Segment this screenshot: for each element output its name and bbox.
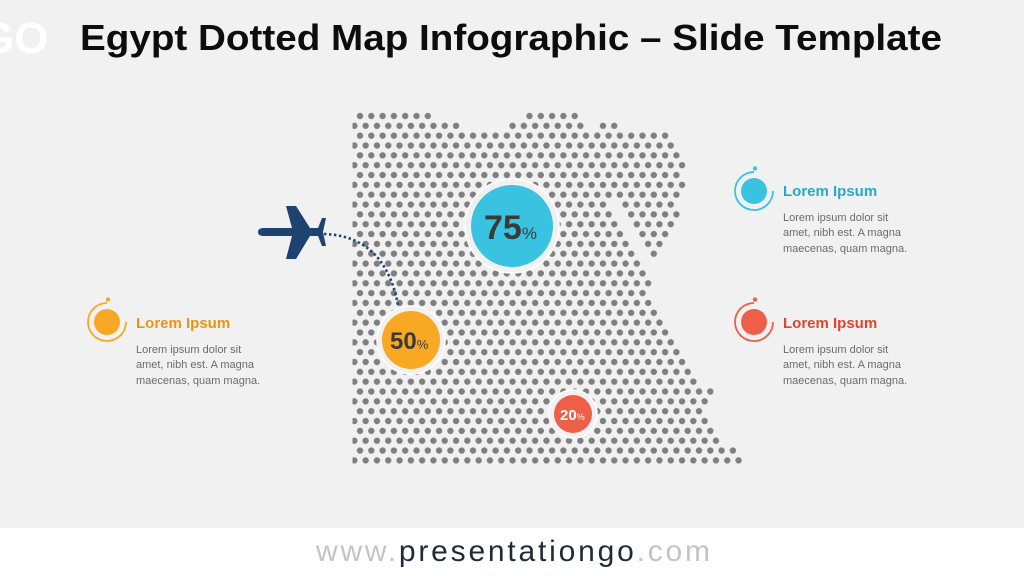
footer: website: www.presentationgo.com: [315, 535, 710, 568]
arrow: dotted flight path: [324, 234, 398, 305]
panel: red item: amet, nibh est. A magna: [783, 359, 902, 371]
icon: airplane: [258, 206, 326, 259]
title: Egypt Dotted Map Infographic – Slide Template: [80, 17, 942, 58]
panel: red item: Lorem ipsum dolor sit: [783, 344, 888, 356]
panel: orange item: amet, nibh est. A magna: [136, 359, 255, 371]
panel: orange item: Lorem Ipsum: [136, 315, 230, 332]
icon: red circle: [735, 297, 773, 341]
panel: blue item: amet, nibh est. A magna: [783, 227, 902, 239]
panel: red item: Lorem Ipsum: [783, 315, 877, 332]
panel: orange item: Lorem ipsum dolor sit: [136, 344, 241, 356]
bubble: 75%: [465, 179, 559, 273]
icon: blue circle: [735, 166, 773, 210]
panel: blue item: [735, 166, 907, 255]
bubble: 75%: 75%: [484, 209, 537, 247]
panel: blue item: Lorem Ipsum: [783, 183, 877, 200]
bubble: 20%: 20%: [560, 407, 585, 424]
bubble: 20%: [549, 390, 597, 438]
bubble: 50%: 50%: [390, 328, 429, 355]
dotted map of Egypt: [352, 111, 745, 465]
bubble: 50%: [377, 306, 445, 374]
panel: orange item: [88, 297, 260, 387]
panel: orange item: maecenas, quam magna.: [136, 375, 260, 387]
panel: red item: [735, 297, 907, 387]
panel: red item: maecenas, quam magna.: [783, 375, 907, 387]
panel: blue item: maecenas, quam magna.: [783, 243, 907, 255]
panel: blue item: Lorem ipsum dolor sit: [783, 212, 888, 224]
icon: orange circle: [88, 297, 126, 341]
